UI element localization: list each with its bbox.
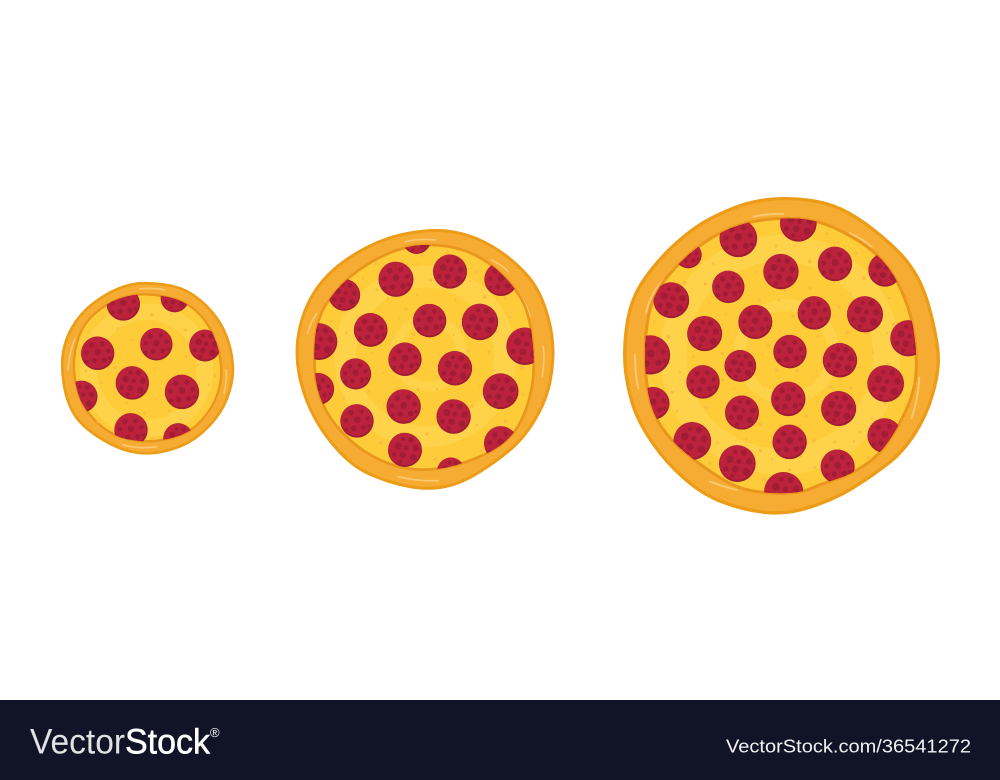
large pizza pepperoni (631, 205, 926, 511)
logo wordmark: ® (210, 725, 220, 740)
large pizza cheese (645, 218, 916, 493)
logo wordmark (30, 722, 220, 762)
small pepperoni pizza (62, 283, 233, 453)
logo wordmark: Stock (125, 722, 210, 762)
footer bar (0, 700, 1000, 780)
image id url: VectorStock.com/36541272 (726, 736, 971, 756)
logo wordmark: Vector (30, 722, 125, 762)
small pizza crust highlights (68, 288, 226, 448)
medium pizza cheese texture (326, 251, 524, 461)
medium pizza pepperoni (301, 226, 544, 486)
large pizza crust (625, 199, 938, 513)
large pizza cheese texture (652, 232, 914, 481)
large pizza crust highlights (635, 214, 919, 490)
small pizza crust (62, 283, 233, 453)
small pizza cheese texture (80, 304, 216, 440)
large pepperoni pizza (625, 199, 938, 513)
small pizza pepperoni (66, 284, 221, 453)
small pizza cheese (74, 294, 221, 441)
medium pepperoni pizza (297, 226, 553, 488)
medium pizza cheese (314, 245, 534, 470)
medium pizza crust (297, 230, 553, 488)
medium pizza crust highlights (308, 239, 544, 481)
